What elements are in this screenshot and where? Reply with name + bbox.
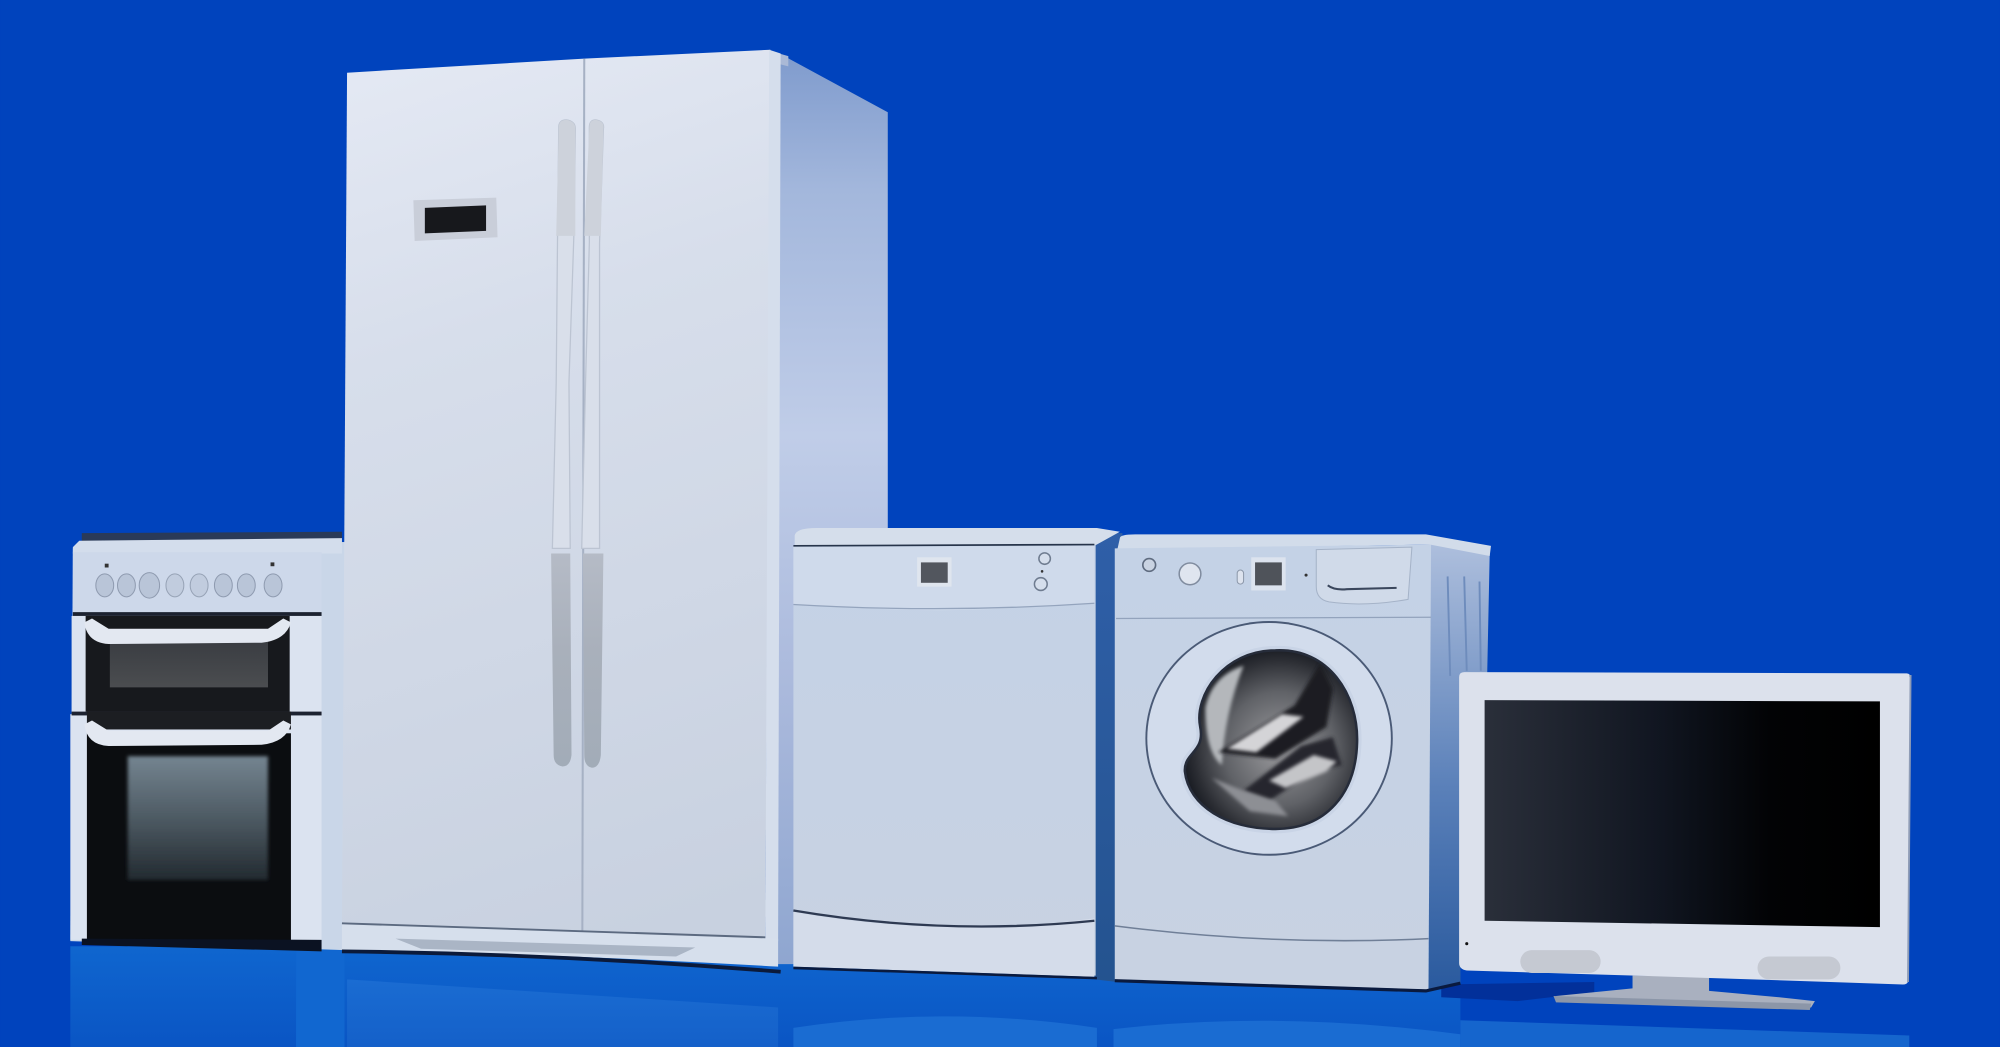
stove control panel bbox=[73, 552, 322, 616]
washer controls bbox=[1143, 557, 1308, 590]
fridge doors bbox=[342, 50, 770, 941]
washer drum bbox=[1185, 650, 1357, 829]
upper oven door bbox=[72, 616, 322, 714]
TV frame bbox=[1459, 672, 1911, 985]
TV speakers bbox=[1520, 950, 1840, 979]
stove bbox=[70, 532, 345, 951]
TV shadow on floor bbox=[1441, 982, 1594, 1001]
washer lower line bbox=[1115, 926, 1428, 941]
floor reflections bbox=[70, 946, 1909, 1047]
fridge side bbox=[770, 54, 888, 964]
lower oven door bbox=[70, 712, 322, 942]
fridge bbox=[342, 50, 888, 972]
dishwasher front bbox=[793, 545, 1096, 976]
stove top bbox=[73, 538, 342, 553]
stove base bbox=[82, 939, 322, 951]
gap between dishwasher and washer bbox=[1094, 533, 1122, 982]
washing machine bbox=[1115, 534, 1491, 991]
fridge hinge bbox=[770, 51, 788, 66]
fridge display bbox=[413, 198, 498, 241]
washer door ring bbox=[1145, 621, 1393, 856]
dishwasher control strip bbox=[793, 546, 1094, 610]
stove burners bbox=[82, 532, 342, 542]
TV indicator bbox=[1465, 942, 1468, 945]
television bbox=[1459, 672, 1911, 1010]
TV stand bbox=[1553, 976, 1815, 1010]
dishwasher bbox=[793, 528, 1122, 982]
detergent drawer bbox=[1316, 547, 1412, 604]
fridge door edge bbox=[765, 50, 781, 941]
washer top bbox=[1117, 534, 1491, 556]
washer front bbox=[1115, 545, 1431, 990]
washer side bbox=[1428, 542, 1490, 990]
fridge base bbox=[342, 923, 781, 972]
dishwasher kickplate bbox=[793, 912, 1094, 977]
TV screen bbox=[1485, 700, 1880, 927]
fridge handles bbox=[551, 120, 604, 768]
stove body bbox=[70, 542, 345, 950]
dishwasher top bbox=[795, 528, 1120, 546]
